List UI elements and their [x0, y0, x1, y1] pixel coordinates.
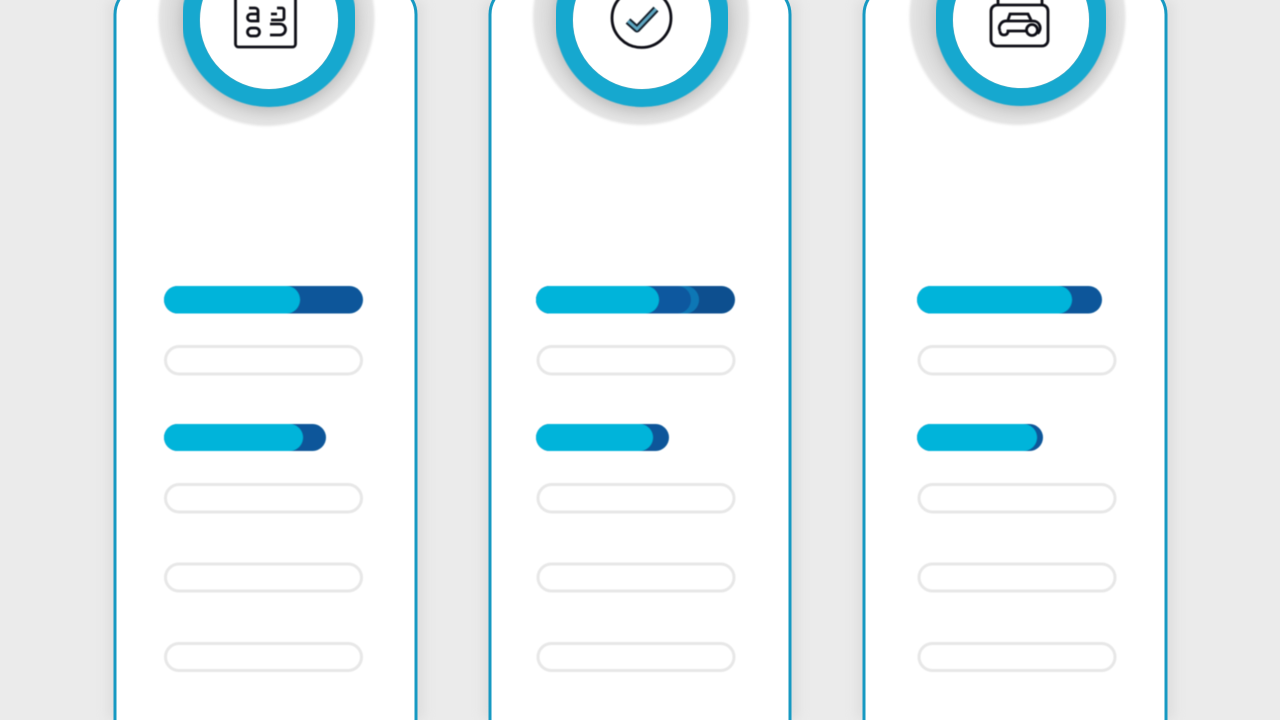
- bar: middle second filled: [536, 424, 669, 451]
- bar: right fourth empty: [919, 644, 1115, 670]
- bar: left first empty: [166, 346, 362, 374]
- bar: right second empty: [919, 484, 1115, 512]
- bar: left second empty: [166, 484, 362, 512]
- bar: right second filled: [917, 424, 1043, 451]
- icon: right badge with device: [910, 0, 1126, 125]
- bar: middle second empty: [538, 484, 734, 512]
- bar: middle third empty: [538, 564, 734, 591]
- bar: right third empty: [919, 564, 1115, 591]
- bar: left fourth empty: [166, 644, 362, 670]
- bar: middle first filled: [536, 286, 735, 314]
- bar: right first empty: [919, 346, 1115, 374]
- bar: left second filled: [164, 424, 326, 451]
- bar: middle fourth empty: [538, 644, 734, 670]
- panel: middle card: [483, 0, 798, 720]
- bar: left first filled: [164, 286, 363, 314]
- panel: right card: [857, 0, 1174, 720]
- bar: right first filled: [917, 286, 1102, 314]
- panel: left card: [108, 0, 424, 720]
- bar: left third empty: [166, 564, 362, 591]
- icon: left badge with checklist: [158, 0, 374, 126]
- icon: middle badge with check mark: [533, 0, 749, 125]
- bar: middle first empty: [538, 346, 734, 374]
